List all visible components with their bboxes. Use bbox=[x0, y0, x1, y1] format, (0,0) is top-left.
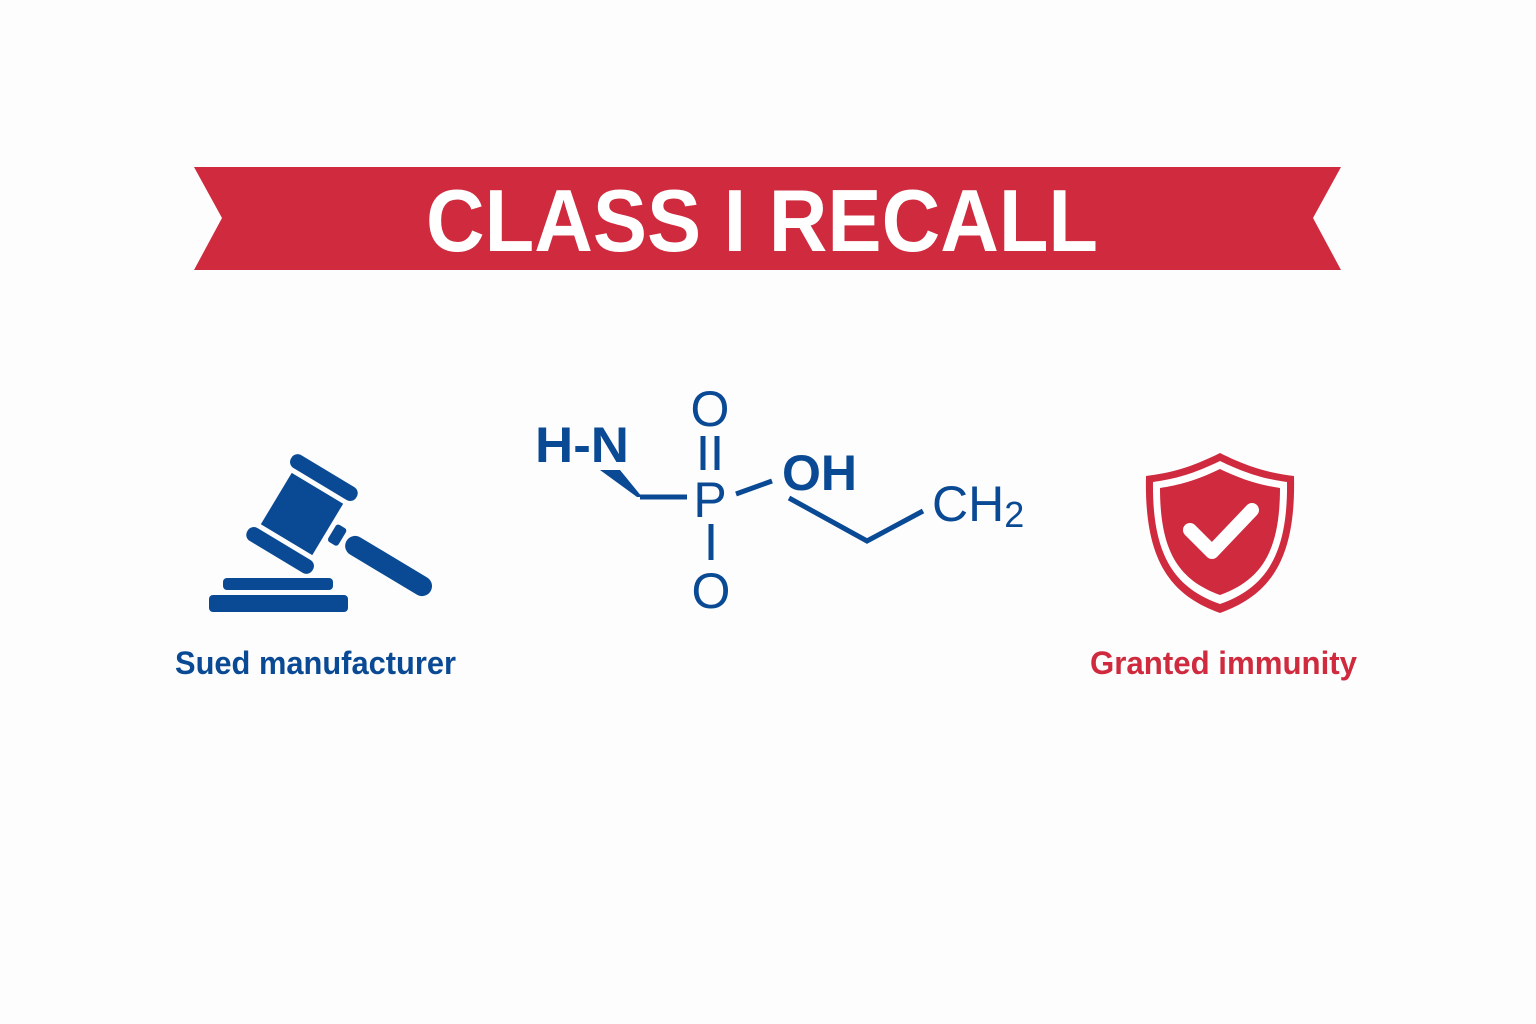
chemical structure: CH bbox=[932, 476, 1004, 532]
chemical structure: P bbox=[693, 472, 727, 528]
title: CLASS I RECALL bbox=[426, 171, 1098, 270]
icon: gavel bbox=[209, 452, 456, 634]
icon: shield with check bbox=[1146, 453, 1294, 613]
chemical structure: OH bbox=[782, 445, 857, 501]
chemical structure: O bbox=[691, 381, 729, 437]
chemical structure: O bbox=[692, 563, 730, 619]
label: sued manufacturer: Sued manufacturer bbox=[175, 645, 456, 681]
chemical structure: H-N bbox=[535, 417, 629, 473]
chemical structure bbox=[535, 381, 1024, 619]
title banner bbox=[194, 167, 1341, 270]
chemical structure: 2 bbox=[1004, 494, 1024, 535]
label: granted immunity: Granted immunity bbox=[1090, 645, 1357, 681]
